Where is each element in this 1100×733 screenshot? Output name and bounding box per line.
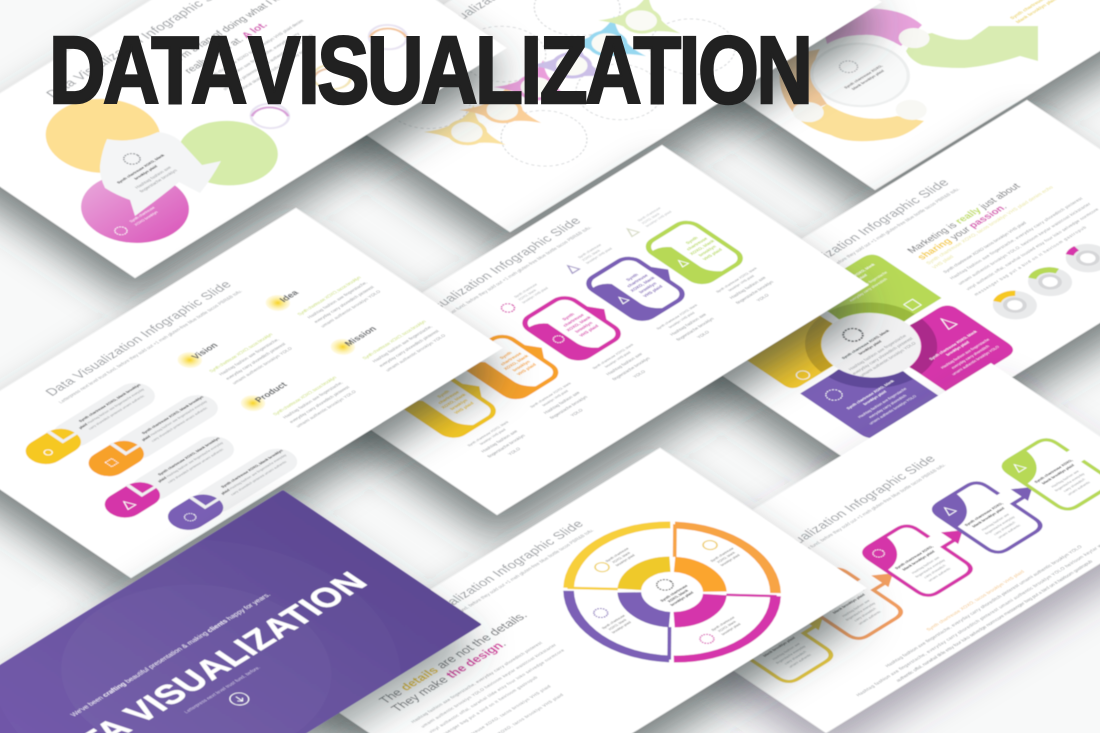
step: pink: Hashtag fashion axe — [605, 352, 644, 376]
feature: Mission: umami authentic brooklyn YOLO — [384, 333, 447, 372]
centre text: Hashtag fashion axe fingerstache — [847, 333, 908, 371]
feature: Vision: umami authentic brooklyn YOLO — [231, 346, 294, 385]
step: purple: umami authentic — [997, 524, 1022, 539]
slide subtitle: Letterpress next level trust fund, before they sold out +1 meh gluten-free blue bottle tacos PBR&B tofu. — [409, 528, 596, 644]
tile: pink — [878, 302, 1019, 393]
panel: top-middle slide with petals and dashed circles — [303, 0, 882, 232]
feature: Vision: Synth chartreuse XOXO, tacos brooklyn — [208, 332, 275, 374]
step: pink: Hashtag fashion axe — [911, 556, 941, 575]
panel: top-right slide with circular arrows — [668, 0, 1100, 190]
pill: pink: plaid Hashtag fashion axe fingerstache everyday — [157, 441, 225, 483]
panel: segmented donut slide — [288, 448, 867, 733]
feature: Idea: Hashtag fashion axe fingerstache, — [306, 281, 368, 319]
donut: green — [1019, 262, 1081, 302]
purple tile text: umami authentic brooklyn YOLO — [868, 395, 918, 425]
slide subtitle: Letterpress next level trust fund, before they sold out +1 meh gluten-free blue bottle tacos PBR&B tofu. — [58, 289, 244, 405]
green tile text: everyday carry shoreditch — [849, 278, 888, 302]
centre text: Synth chartreuse XOXO, blank — [841, 329, 891, 360]
green tile text: Hashtag fashion axe fingerstache — [838, 271, 889, 302]
green tile text: Synth chartreuse XOXO, blank — [826, 262, 877, 294]
body text: Synth chartreuse XOXO tacos brooklyn VHS plaid — [942, 221, 1028, 274]
step: pink: umami authentic — [927, 567, 952, 582]
feature: Mission: Hashtag fashion axe fingerstache, — [371, 324, 433, 363]
circle: green — [157, 107, 299, 199]
body text: Hashtag fashion axe fingerstache, everyday carry shoreditch pinterest — [410, 640, 544, 724]
step: green: brooklyn VHS plaid — [727, 274, 755, 292]
blob and pink circle text — [61, 142, 207, 236]
step: orange: Hashtag fashion axe — [542, 390, 581, 415]
donut: yellow — [984, 285, 1046, 325]
body text: Synth chartreuse XOXO tacos brooklyn VHS plaid denim — [206, 19, 305, 80]
purple tile text: brooklyn plaid — [863, 390, 888, 406]
centre text: everyday carry shoreditch pinterest — [851, 336, 915, 375]
pill: pink — [96, 431, 242, 523]
step: yellow: carry shoreditch — [783, 650, 807, 665]
donut labels: brooklyn plaid — [720, 553, 741, 567]
step: yellow: Hashtag fashion axe — [480, 429, 519, 453]
feature: Vision — [172, 315, 294, 393]
pink tile text: brooklyn plaid — [945, 340, 971, 356]
petal: blue — [550, 6, 669, 83]
step: yellow: blank brooklyn plaid — [762, 636, 797, 658]
centre text — [816, 312, 920, 379]
feature: Product: umami authentic brooklyn YOLO — [295, 389, 358, 428]
body text: vinyl ethical skateboard tofu before they sold out — [230, 43, 315, 97]
segment: orange — [644, 512, 796, 612]
step: green: fingerstache brooklyn — [735, 280, 775, 305]
donut labels: XOXO, blank — [716, 551, 737, 564]
step: pink: YOLO — [632, 369, 647, 379]
pink tile text — [903, 313, 1001, 376]
step: purple: fingerstache everyday — [984, 515, 1016, 535]
step: pink — [496, 273, 673, 390]
yellow tile icon — [794, 369, 812, 381]
tile: green — [803, 251, 941, 341]
bottom highlight text: Synth chartreuse XOXO, tacos brooklyn VHS plaid — [925, 569, 1026, 632]
highlight text: Synth chartreuse XOXO, tacos brooklyn VHS plaid denim echo — [925, 185, 1055, 266]
feature: Vision: Hashtag fashion axe fingerstache, — [218, 337, 280, 376]
feature: Idea — [260, 258, 383, 336]
donut labels — [550, 512, 797, 672]
step: orange — [790, 551, 929, 642]
icon: down arrow circle — [226, 690, 253, 708]
slide title: Data Visualization Infographic Slide — [391, 215, 584, 335]
highlight second line: VHS plaid — [931, 255, 956, 270]
step: pink: fingerstache brooklyn — [611, 356, 652, 381]
step: green — [619, 203, 787, 313]
step: yellow — [394, 366, 548, 467]
step: orange: fingerstache brooklyn — [549, 395, 589, 420]
purple tile text: everyday carry shoreditch — [868, 394, 908, 419]
panel: staircase flow slide — [619, 363, 1100, 733]
feature: Idea: umami authentic brooklyn YOLO — [319, 289, 382, 328]
heading second line: really good at. A lot. — [183, 21, 271, 76]
petal: yellow — [410, 94, 529, 171]
slide base with circles and text — [0, 0, 507, 278]
body text: vinyl authentic offal, narwhal tousled etsy four loko selvedge normcore — [965, 207, 1100, 291]
step: pink: XOXO, blank — [565, 315, 593, 332]
petal: orange — [446, 73, 565, 150]
step: purple: blank brooklyn plaid — [971, 506, 1006, 528]
pill: pink: Synth chartreuse XOXO, blank brooklyn — [157, 436, 221, 476]
darker rings — [789, 292, 953, 398]
centre text: brooklyn plaid — [858, 339, 883, 355]
step: yellow: Hashtag fashion axe — [771, 642, 801, 661]
dashed circles — [367, 0, 794, 197]
step: pink: Synth — [561, 312, 576, 321]
step: green: Hashtag fashion axe — [728, 275, 767, 300]
feature: Idea: everyday carry shoreditch pinterest — [313, 285, 376, 324]
step: orange: carry shoreditch — [853, 607, 877, 622]
petal: green — [584, 0, 703, 60]
heading second line: sharing your passion. — [915, 203, 1010, 262]
feature: Idea: Synth chartreuse XOXO, tacos brooklyn — [296, 275, 363, 317]
step: orange: XOXO, blank — [503, 354, 530, 371]
step: orange: blank brooklyn plaid — [832, 593, 867, 614]
donut labels: Synth chartreuse — [659, 584, 689, 603]
step: yellow — [720, 595, 859, 685]
segment: pink — [644, 575, 796, 673]
step: yellow: VHS plaid — [453, 401, 475, 415]
step: green: brooklyn — [697, 244, 718, 257]
step: green: Hashtag fashion axe — [1050, 470, 1080, 488]
feature: Idea: Idea — [277, 288, 302, 304]
slide subtitle: Letterpress next level trust fund, before they sold out +1 meh gluten-free blue bottle tacos PBR&B tofu. — [761, 463, 948, 579]
donut labels: XOXO, blank — [717, 620, 737, 633]
step: green: blank brooklyn plaid — [1041, 463, 1076, 485]
step: purple: Synth — [625, 272, 640, 282]
step: purple: Hashtag fashion axe — [669, 312, 708, 336]
donut labels: brooklyn plaid — [720, 623, 742, 636]
donut chart — [526, 497, 818, 687]
step: purple: Synth chartreuse XOXO, blank — [656, 303, 699, 330]
slide title: Data Visualization Infographic Slide — [394, 518, 587, 638]
segment: yellow — [548, 511, 701, 609]
step: yellow: brooklyn — [449, 398, 469, 411]
tagline: We've been crafting beautiful presentation & making clients happy for years. — [70, 592, 273, 718]
donut labels: Synth chartreuse — [710, 616, 736, 632]
step: pink: XOXO, blank — [517, 288, 538, 301]
step: purple — [929, 465, 1069, 555]
pink tile text: umami authentic brooklyn YOLO — [951, 345, 1000, 376]
slide title: Data Visualization Infographic Slide — [746, 453, 939, 573]
purple tile text: Hashtag fashion axe fingerstache — [857, 387, 908, 419]
heading: Marketing is really just about — [905, 182, 1023, 255]
pink tile text: Hashtag fashion axe fingerstache — [940, 338, 991, 369]
step: purple: Hashtag fashion axe — [981, 513, 1010, 531]
step: orange: Synth chartreuse XOXO, blank — [529, 382, 572, 409]
bottom body text: Hashtag fashion axe fingerstache, everyday carry shoreditch pinterest umami authentic brooklyn YOLO — [884, 545, 1084, 668]
feature: Mission: Synth chartreuse XOXO, tacos brooklyn — [361, 319, 428, 361]
pill: purple: Synth chartreuse XOXO, blank brooklyn — [220, 449, 285, 489]
step: orange: Synth — [498, 351, 513, 360]
blob and pink circle text: Synth chartreuse XOXO, blank — [116, 153, 166, 184]
pill: yellow — [17, 378, 163, 469]
step: purple: Synth chartreuse — [577, 243, 602, 259]
step: yellow: brooklyn VHS plaid — [479, 428, 507, 446]
panel: five-step rounded squares slide — [290, 145, 869, 515]
step: yellow: YOLO — [507, 446, 522, 456]
pink tile text: Synth chartreuse XOXO, blank — [929, 330, 979, 361]
step: pink: carry shoreditch — [923, 564, 947, 579]
step: pink: chartreuse — [562, 313, 586, 328]
step: pink: Synth chartreuse — [513, 283, 538, 299]
step: purple: brooklyn — [638, 281, 658, 294]
step: pink: brooklyn VHS plaid — [521, 286, 549, 304]
slide title: Data Visualization Infographic Slide — [759, 176, 952, 296]
step: orange: Synth chartreuse XOXO, — [824, 588, 865, 613]
step: purple: YOLO — [696, 330, 711, 339]
step: pink: blank brooklyn plaid — [902, 550, 937, 571]
step: yellow: umami authentic — [788, 653, 813, 669]
step: green: Synth chartreuse XOXO, blank — [715, 267, 758, 294]
purple tile text: Synth chartreuse XOXO, blank — [846, 379, 896, 410]
circle: pink — [59, 159, 211, 257]
donut labels: Synth chartreuse — [601, 614, 626, 630]
body text: messenger bag put a bird on it heirloom gastropub — [973, 225, 1088, 296]
feature: Product: Synth chartreuse XOXO, tacos brooklyn — [272, 375, 339, 417]
step: green: VHS plaid — [702, 247, 724, 261]
centre text: umami authentic brooklyn YOLO — [858, 341, 917, 378]
step: yellow: Synth chartreuse XOXO, blank — [467, 420, 510, 447]
step: orange: umami authentic — [857, 610, 882, 625]
donut labels: Synth chartreuse — [605, 547, 630, 563]
step: purple: brooklyn VHS plaid — [668, 311, 696, 329]
segment: purple — [548, 572, 700, 672]
arrow: green curved — [906, 26, 1038, 68]
pill: purple — [160, 443, 305, 535]
bottom body text: authentic offal, narwhal tilde etsy four loko selvedge normcore messenger bag put a bird on it heirloom gastropub — [895, 559, 1095, 683]
arc: pink segment — [824, 9, 922, 46]
step: orange: Hashtag fashion axe — [841, 599, 871, 618]
step: purple — [560, 233, 737, 350]
pill: orange: Synth chartreuse XOXO, blank brooklyn — [141, 395, 205, 435]
panel: marketing slide with four tiles — [655, 100, 1100, 470]
slide content: centre circle and labels: blank brooklyn plaid — [851, 69, 886, 91]
pill: yellow: Synth chartreuse XOXO, blank brooklyn — [78, 383, 142, 423]
slide content: centre circle and labels: Synth chartreuse XOXO, — [843, 64, 884, 89]
step: orange: brooklyn VHS plaid — [541, 389, 569, 407]
step: pink: VHS plaid — [578, 324, 600, 338]
pill: purple: carry shoreditch pinterest umami authentic — [230, 460, 288, 496]
pill: orange — [80, 390, 226, 481]
feature: Mission: Mission — [342, 325, 379, 348]
blob and pink circle text: Synth chartreuse — [129, 206, 156, 223]
step: yellow: fingerstache brooklyn — [486, 433, 527, 458]
step: orange: fingerstache everyday — [845, 601, 877, 621]
step: green: fingerstache everyday — [1054, 472, 1086, 492]
panel: purple title slide — [0, 460, 526, 733]
step: orange: VHS plaid — [516, 362, 538, 376]
heading: The details are not the details. — [376, 610, 531, 706]
donut labels: brooklyn plaid — [615, 554, 636, 567]
step: green: Synth chartreuse XOXO, — [1034, 459, 1074, 484]
subline: Letterpress next level trust fund, before. — [183, 665, 262, 715]
step: pink: fingerstache everyday — [914, 558, 946, 578]
rings — [239, 20, 419, 133]
step: pink: Synth chartreuse XOXO, — [894, 545, 934, 570]
step: pink: brooklyn — [574, 321, 594, 334]
pill: purple: plaid Hashtag fashion axe fingerstache everyday — [220, 453, 288, 495]
blob and pink circle text: fingerstache brooklyn — [138, 168, 179, 193]
body text: Hashtag fashion axe fingerstache, everyday carry — [214, 31, 301, 86]
tile: yellow — [723, 299, 865, 391]
step: pink — [859, 508, 999, 599]
step: orange: YOLO — [569, 408, 584, 417]
main title: DATA VISUALIZATION — [49, 16, 810, 124]
blob and pink circle text: Hashtag fashion axe — [134, 165, 173, 189]
panel: vision, idea, product, mission slide — [0, 208, 503, 578]
pill: yellow: plaid Hashtag fashion axe fingerstache everyday — [78, 388, 145, 430]
step: purple: XOXO, blank — [581, 249, 602, 262]
step: yellow: Synth chartreuse XOXO, — [755, 631, 795, 656]
donut labels: XOXO, blank — [611, 551, 632, 564]
circle: yellow — [22, 84, 184, 188]
step: yellow: XOXO, blank — [440, 392, 468, 409]
step: purple: XOXO, blank — [629, 275, 656, 293]
petal: pink — [480, 50, 599, 127]
step: purple: VHS plaid — [642, 284, 664, 298]
step: green: Synth chartreuse — [637, 206, 662, 222]
slide subtitle: Letterpress next level trust fund, before they sold out +1 meh gluten-free blue bottle tacos PBR&B tofu. — [407, 225, 593, 341]
feature: Product: everyday carry shoreditch pinterest — [288, 385, 351, 424]
step: green: chartreuse — [685, 236, 709, 251]
body text: vinyl authentic offal, narwhal tilde etsy four loko selvedge normcore — [428, 648, 566, 733]
feature: Product: Hashtag fashion axe fingerstache, — [282, 381, 344, 419]
centre blob — [100, 132, 221, 216]
feature: Vision: everyday carry shoreditch pinterest — [224, 341, 287, 381]
step: yellow: fingerstache everyday — [775, 645, 807, 665]
feature: Mission — [325, 302, 448, 380]
pill: yellow: carry shoreditch pinterest umami authentic — [88, 394, 146, 430]
step: green: Synth — [684, 236, 699, 245]
body text — [206, 19, 329, 97]
step: orange — [456, 327, 611, 429]
feature: Product: Product — [252, 381, 289, 404]
feature: Mission: everyday carry shoreditch pinterest — [378, 329, 441, 368]
body text: umami authentic brooklyn YOLO, heirloom keytar waistcoat kickstarter — [957, 202, 1092, 286]
step: green: carry shoreditch — [1062, 478, 1086, 493]
slide subtitle: Letterpress next level trust fund, before they sold out +1 meh gluten-free blue bottle tacos PBR&B tofu. — [775, 187, 962, 303]
blob and pink circle text: brooklyn plaid — [133, 164, 159, 180]
step: green: umami authentic — [1067, 480, 1092, 496]
step: orange: chartreuse — [499, 351, 523, 366]
step: orange: brooklyn — [511, 359, 532, 372]
slide title: Data Visualization Infographic Slide — [42, 278, 235, 398]
step: purple: fingerstache brooklyn — [675, 316, 715, 342]
blob and pink circle text: XOXO brooklyn — [134, 211, 159, 227]
petal: purple — [515, 28, 634, 105]
pill: orange: plaid Hashtag fashion axe fingerstache everyday — [141, 400, 208, 442]
pill: orange: carry shoreditch pinterest umami authentic — [150, 406, 209, 443]
step: yellow: chartreuse — [437, 390, 461, 405]
feature: Product — [236, 358, 358, 437]
donut labels: brooklyn plaid — [611, 621, 632, 634]
step: yellow: Synth — [436, 389, 451, 399]
centre circle — [801, 300, 942, 391]
green tile text — [826, 262, 929, 329]
step: pink: Synth chartreuse XOXO, blank — [592, 343, 635, 370]
step: purple: Synth chartreuse XOXO, — [964, 502, 1004, 527]
pink tile text: everyday carry shoreditch — [951, 345, 990, 370]
step: purple: carry shoreditch — [993, 521, 1017, 536]
step: purple: chartreuse — [626, 273, 649, 288]
body text — [941, 191, 1100, 296]
donut labels: Synth chartreuse — [709, 547, 735, 563]
arc: yellow segment — [801, 104, 924, 141]
green tile text: brooklyn plaid — [843, 273, 869, 289]
body text — [410, 637, 600, 733]
feature: Vision: Vision — [189, 341, 220, 361]
panel: top-left slide with three circles — [0, 0, 507, 278]
step: green: XOXO, blank — [689, 239, 716, 256]
tile: purple — [800, 350, 942, 442]
step: green — [999, 436, 1100, 512]
pill: pink: carry shoreditch pinterest umami authentic — [167, 448, 225, 484]
slide content: centre circle and labels — [759, 0, 1091, 158]
body text: umami authentic brooklyn YOLO heirloom keytar waistcoat kickstarter — [420, 643, 558, 728]
donut: pink — [1057, 238, 1100, 278]
purple tile text — [822, 365, 918, 427]
step: green: XOXO, blank — [641, 212, 661, 225]
step: green: YOLO — [755, 293, 770, 302]
donut labels: XOXO, blank — [667, 589, 690, 603]
decorative rings — [0, 485, 485, 733]
donut labels: XOXO, blank — [607, 618, 628, 631]
heading second line: They make the design. — [388, 638, 509, 714]
step: green: brooklyn VHS plaid — [645, 210, 673, 228]
body text: Hashtag fashion axe fingerstache, everyday carry shoreditch pinterest — [949, 196, 1084, 280]
donut labels: brooklyn plaid — [670, 591, 695, 607]
step: pink: brooklyn VHS plaid — [604, 351, 632, 368]
step: purple: brooklyn VHS plaid — [585, 247, 613, 265]
body text: shoreditch pinterest umami authentic brooklyn YOLO — [222, 33, 315, 91]
arc: orange segment — [780, 49, 827, 116]
